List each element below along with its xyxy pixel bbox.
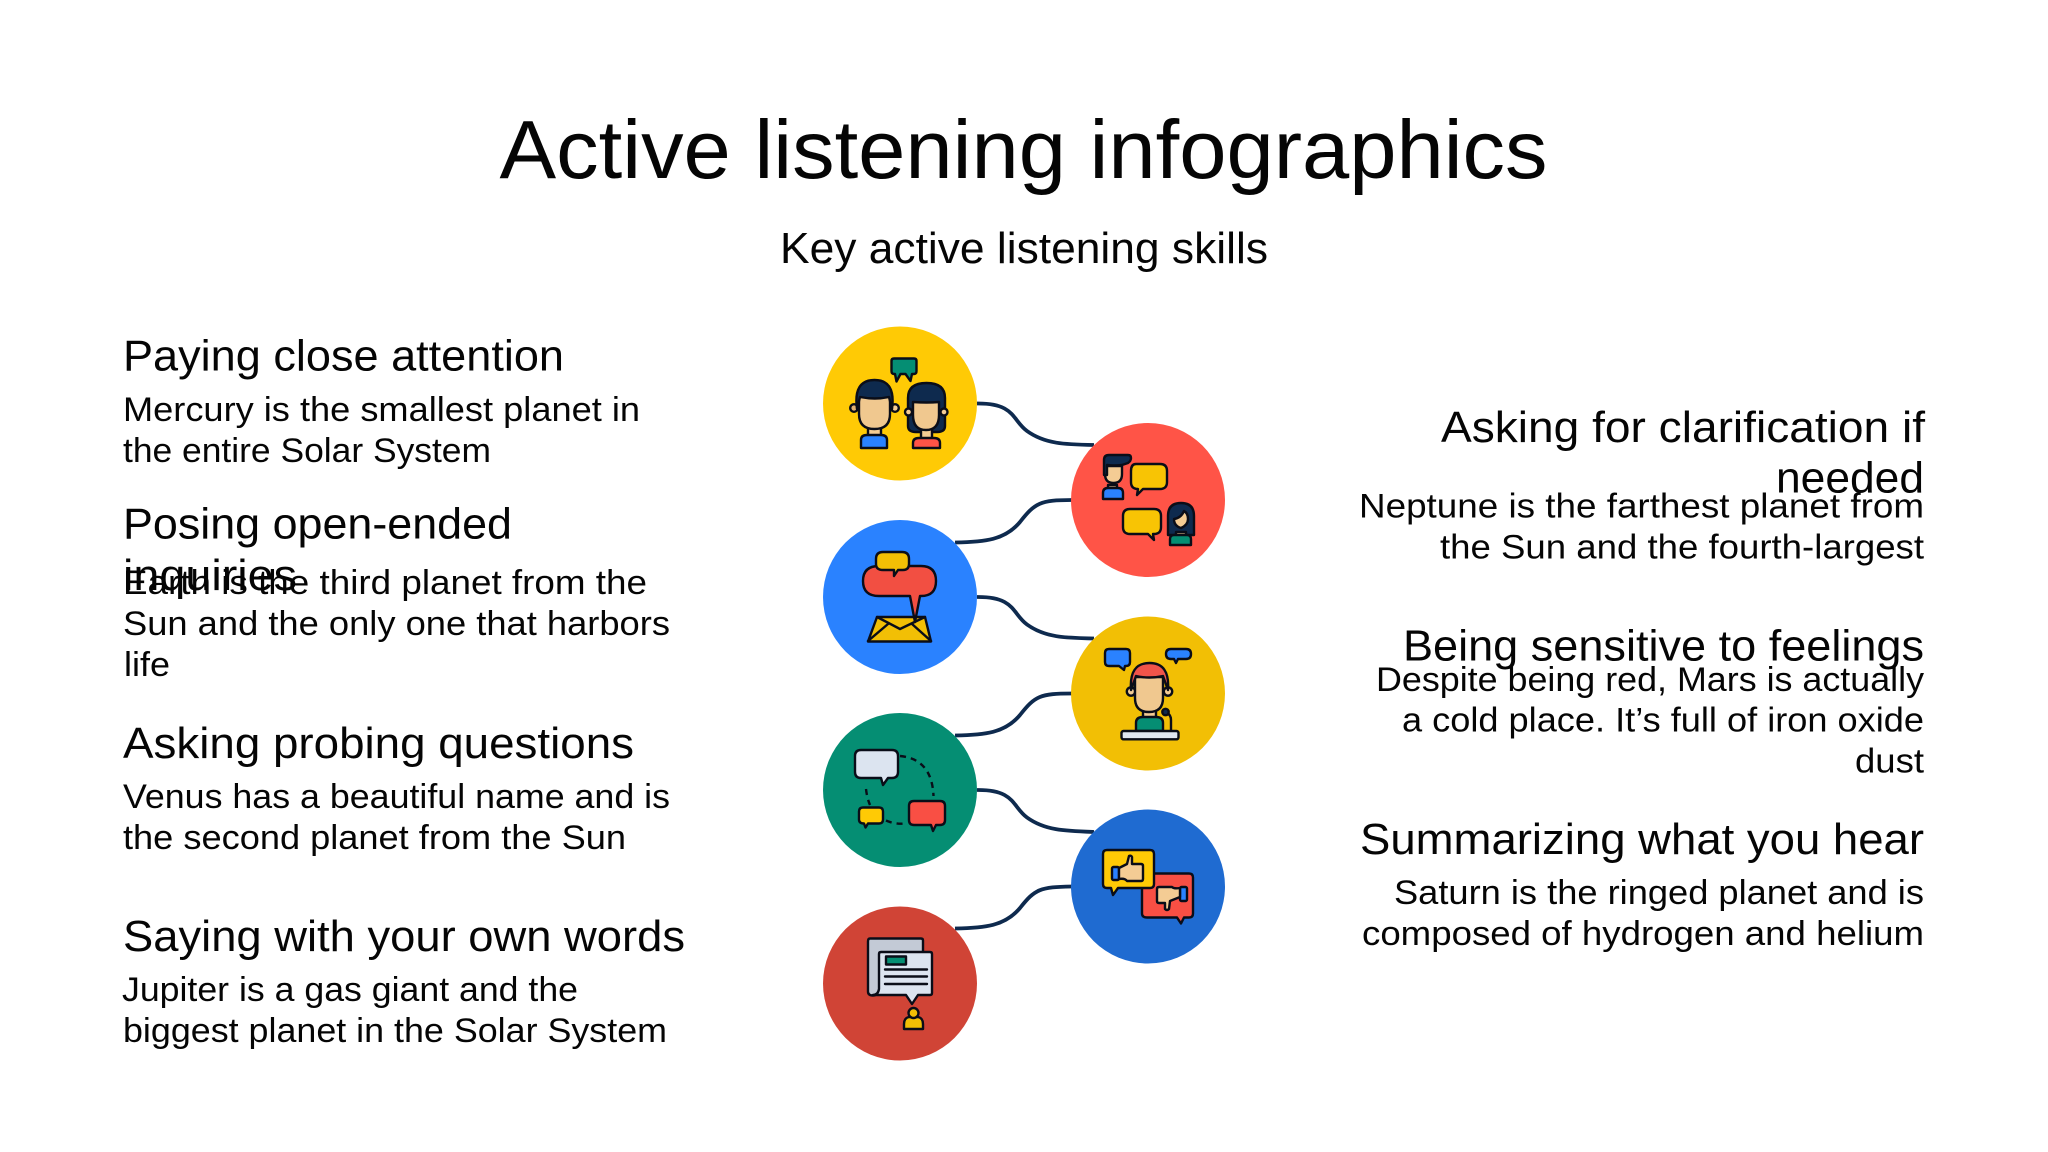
heading: [1441, 404, 1926, 502]
heading: inquiries: [123, 552, 297, 600]
heading: Saying with your own words: [123, 913, 685, 961]
heading: Asking probing questions: [123, 720, 634, 768]
body text: Sun and the only one that harbors: [123, 605, 670, 643]
body text: Earth is the third planet from the: [123, 564, 647, 602]
body text: [1376, 661, 1925, 780]
body text: [123, 564, 670, 684]
body text: dust: [1855, 742, 1925, 780]
body text: Despite being red, Mars is actually: [1376, 661, 1924, 699]
body text: [123, 778, 670, 857]
body text: composed of hydrogen and helium: [1362, 915, 1924, 953]
panel: asking probing questions: [123, 720, 670, 857]
heading: Paying close attention: [123, 332, 564, 380]
icon: two people exchanging chat bubbles on red circle: [1071, 423, 1225, 577]
body text: life: [124, 646, 170, 684]
subtitle: Key active listening skills: [780, 224, 1268, 273]
panel: being sensitive to feelings: [1376, 622, 1925, 780]
body text: Neptune is the farthest planet from: [1359, 488, 1924, 526]
panel: paying close attention: [123, 332, 640, 470]
panel: saying with your own words: [122, 913, 685, 1050]
body text: [1362, 874, 1924, 953]
icon: connected speech bubbles on green circle: [823, 713, 977, 867]
body text: biggest planet in the Solar System: [123, 1012, 667, 1050]
heading: [123, 500, 512, 600]
body text: the second planet from the Sun: [123, 819, 626, 857]
icon: speaker with microphone on amber circle: [1071, 616, 1225, 770]
body text: [123, 391, 640, 470]
panel: posing open-ended inquiries: [123, 500, 670, 684]
icon: two people talking on yellow circle: [823, 326, 977, 480]
heading: Summarizing what you hear: [1360, 816, 1924, 864]
heading: needed: [1776, 454, 1924, 502]
icon: newspaper with speaker on dark red circle: [823, 906, 977, 1060]
body text: Jupiter is a gas giant and the: [122, 971, 578, 1009]
heading: Posing open-ended: [123, 500, 512, 548]
body text: Venus has a beautiful name and is: [123, 778, 670, 816]
body text: [122, 971, 667, 1050]
heading: Being sensitive to feelings: [1403, 622, 1924, 670]
body text: a cold place. It’s full of iron oxide: [1402, 702, 1924, 740]
body text: [1359, 488, 1925, 566]
body text: the Sun and the fourth-largest: [1440, 528, 1925, 566]
icon: thumbs up and thumbs down bubbles on dark blue circle: [1071, 810, 1225, 964]
icon: speech bubbles over envelope on blue circle: [823, 520, 977, 674]
panel: asking for clarification: [1359, 404, 1926, 566]
body text: Mercury is the smallest planet in: [123, 391, 640, 429]
body text: the entire Solar System: [123, 432, 491, 470]
heading: Asking for clarification if: [1441, 404, 1926, 452]
panel: summarizing what you hear: [1360, 816, 1924, 953]
connector lines: [955, 403, 1094, 928]
body text: Saturn is the ringed planet and is: [1394, 874, 1924, 912]
title: Active listening infographics: [500, 103, 1548, 196]
